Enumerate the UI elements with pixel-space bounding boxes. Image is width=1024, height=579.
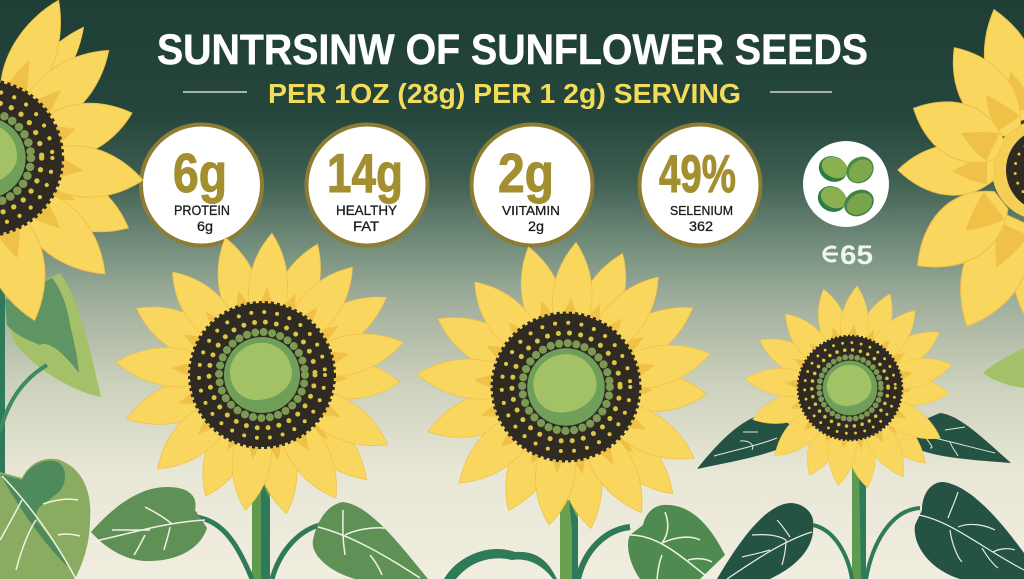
badge: vitamin: 2g xyxy=(498,142,554,204)
badge: protein xyxy=(141,124,262,246)
badge: protein: 6g xyxy=(197,218,213,234)
right plant: leaf xyxy=(983,348,1024,388)
badge: selenium xyxy=(640,124,760,246)
seed count label xyxy=(824,240,873,270)
badge: healthy fat xyxy=(306,124,428,246)
badge: protein: 6g xyxy=(173,142,227,204)
flower 2: stem and leaves xyxy=(444,500,725,579)
flower 3: bloom xyxy=(744,285,955,490)
badge: healthy fat: FAT xyxy=(353,218,379,234)
badge: vitamin xyxy=(472,124,592,246)
badge: protein: PROTEIN xyxy=(174,202,230,218)
badge: vitamin: VIITAMIN xyxy=(502,203,560,218)
flower 2: bloom xyxy=(415,241,715,532)
left flower xyxy=(0,0,146,328)
flower 1: stem and leaves xyxy=(91,480,428,579)
flower 3: stem and leaves xyxy=(697,413,1024,579)
badge: selenium: 362 xyxy=(689,218,713,234)
left plant: stem and leaves xyxy=(0,260,101,579)
badge: vitamin: 2g xyxy=(528,218,544,234)
seed count label: 65 xyxy=(840,240,873,270)
badge: selenium: SELENIUM xyxy=(670,203,733,218)
badge: selenium: 49% xyxy=(659,145,736,204)
subtitle: PER 1OZ (28g) PER 1 2g) SERVING xyxy=(268,78,741,109)
badge: healthy fat: 14g xyxy=(327,142,403,204)
icon: seeds badge xyxy=(803,141,889,227)
title: SUNTRSINW OF SUNFLOWER SEEDS xyxy=(157,26,868,74)
flower 1: bloom xyxy=(114,232,408,517)
badge: healthy fat: HEALTHY xyxy=(336,202,398,218)
right flower xyxy=(898,3,1024,339)
